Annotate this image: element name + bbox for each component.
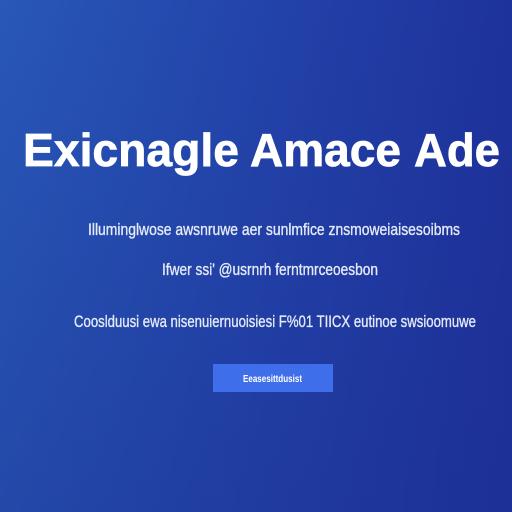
title xyxy=(23,124,500,176)
button xyxy=(213,364,333,392)
title: Exicnagle xyxy=(23,124,239,176)
title: Ade xyxy=(414,124,500,176)
button label: Eeasesittdusist xyxy=(243,374,303,385)
title: Amace xyxy=(250,124,401,176)
text line 2: Ifwer ssi' @usrnrh ferntmrceoesbon xyxy=(162,260,378,279)
